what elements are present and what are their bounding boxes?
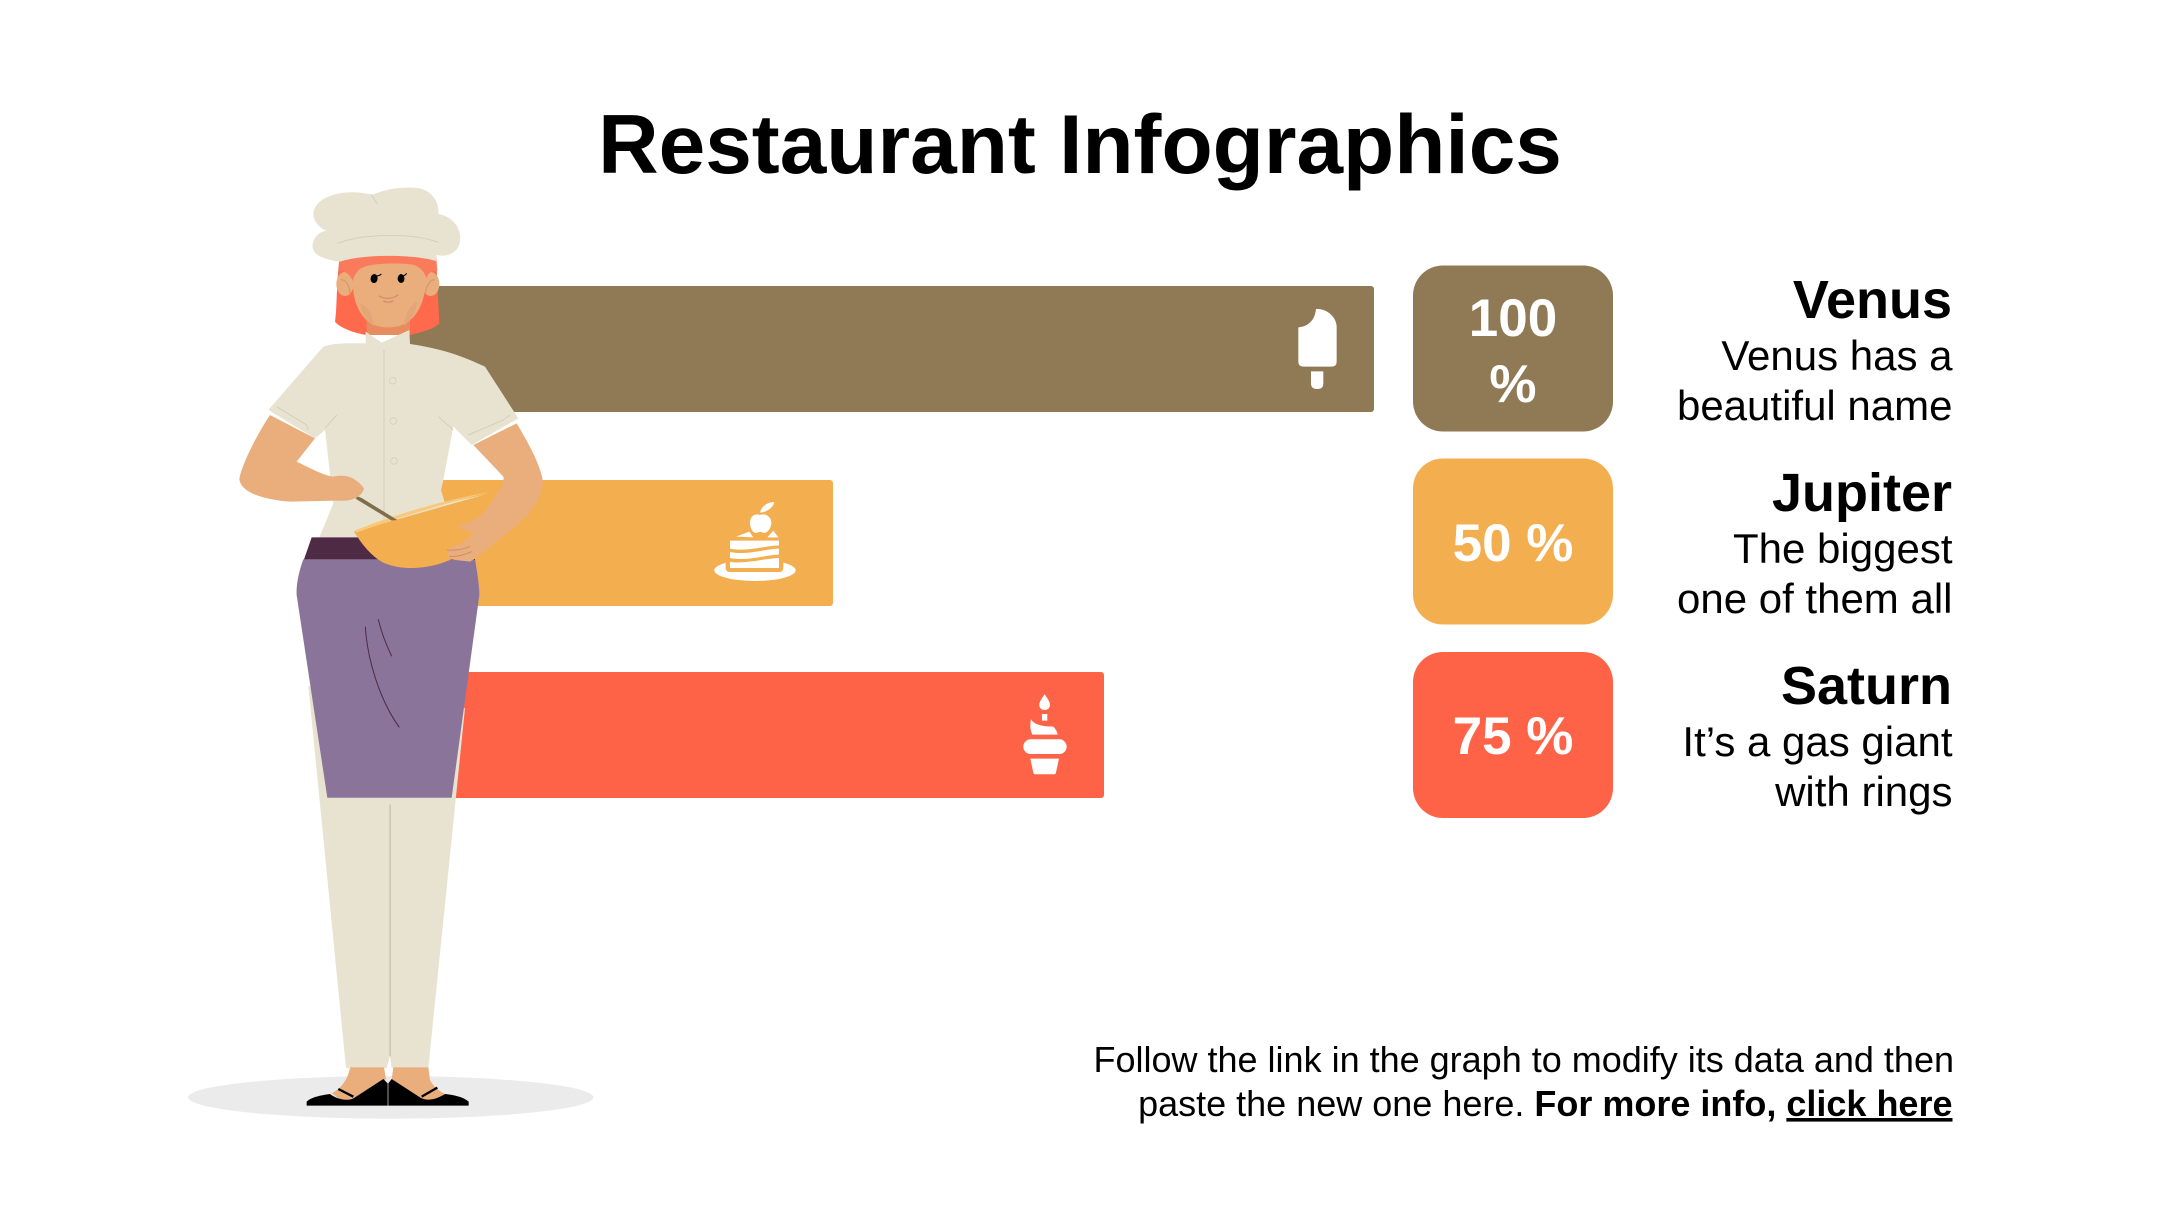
percent pill: 75% <box>1413 652 1613 818</box>
footer note: Follow the link in the graph to modify its data and then <box>1093 1039 1954 1080</box>
footer note <box>1093 1039 1954 1124</box>
label: Jupiter: The biggest <box>1733 525 1953 572</box>
whisk <box>353 494 397 521</box>
icon: popsicle <box>1298 309 1337 389</box>
trousers <box>308 686 465 1068</box>
label: Saturn: Saturn <box>1781 656 1952 716</box>
bar: Venus 100% <box>400 286 1374 412</box>
floor shadow <box>188 1076 593 1119</box>
chef illustration <box>188 187 593 1119</box>
shirt <box>268 330 518 537</box>
head <box>313 187 460 335</box>
bar: Saturn 75% <box>400 672 1104 798</box>
footer note: paste the new one here. For more info, click here <box>1138 1083 1952 1124</box>
percent pill: 100% <box>1413 266 1613 432</box>
label: Venus: beautiful name <box>1677 382 1952 429</box>
right arm <box>447 423 543 562</box>
label: Jupiter: one of them all <box>1677 575 1952 622</box>
label: Venus: Venus <box>1793 270 1952 330</box>
percent pill: 50%: 50 % <box>1453 514 1573 573</box>
percent pill: 100%: 100 <box>1469 289 1557 348</box>
feet and shoes <box>307 1067 469 1106</box>
left arm <box>239 415 364 502</box>
label: Venus <box>1677 270 1953 429</box>
label: Jupiter <box>1677 463 1953 622</box>
label: Saturn: with rings <box>1774 768 1952 815</box>
percent pill: 75%: 75 % <box>1453 707 1573 766</box>
apron <box>297 559 479 798</box>
icon: cake slice <box>714 502 796 581</box>
percent pill: 50% <box>1413 458 1613 624</box>
bar: Jupiter 50% <box>400 480 833 606</box>
bowl <box>354 492 492 568</box>
icon: cupcake <box>1023 694 1067 774</box>
label: Venus: Venus has a <box>1721 332 1953 379</box>
belt <box>304 537 475 560</box>
label: Saturn <box>1682 656 1953 815</box>
label: Saturn: It’s a gas giant <box>1682 718 1953 765</box>
percent pill: 100%: % <box>1489 355 1537 414</box>
label: Jupiter: Jupiter <box>1772 463 1952 523</box>
title: Restaurant Infographics <box>598 97 1562 191</box>
